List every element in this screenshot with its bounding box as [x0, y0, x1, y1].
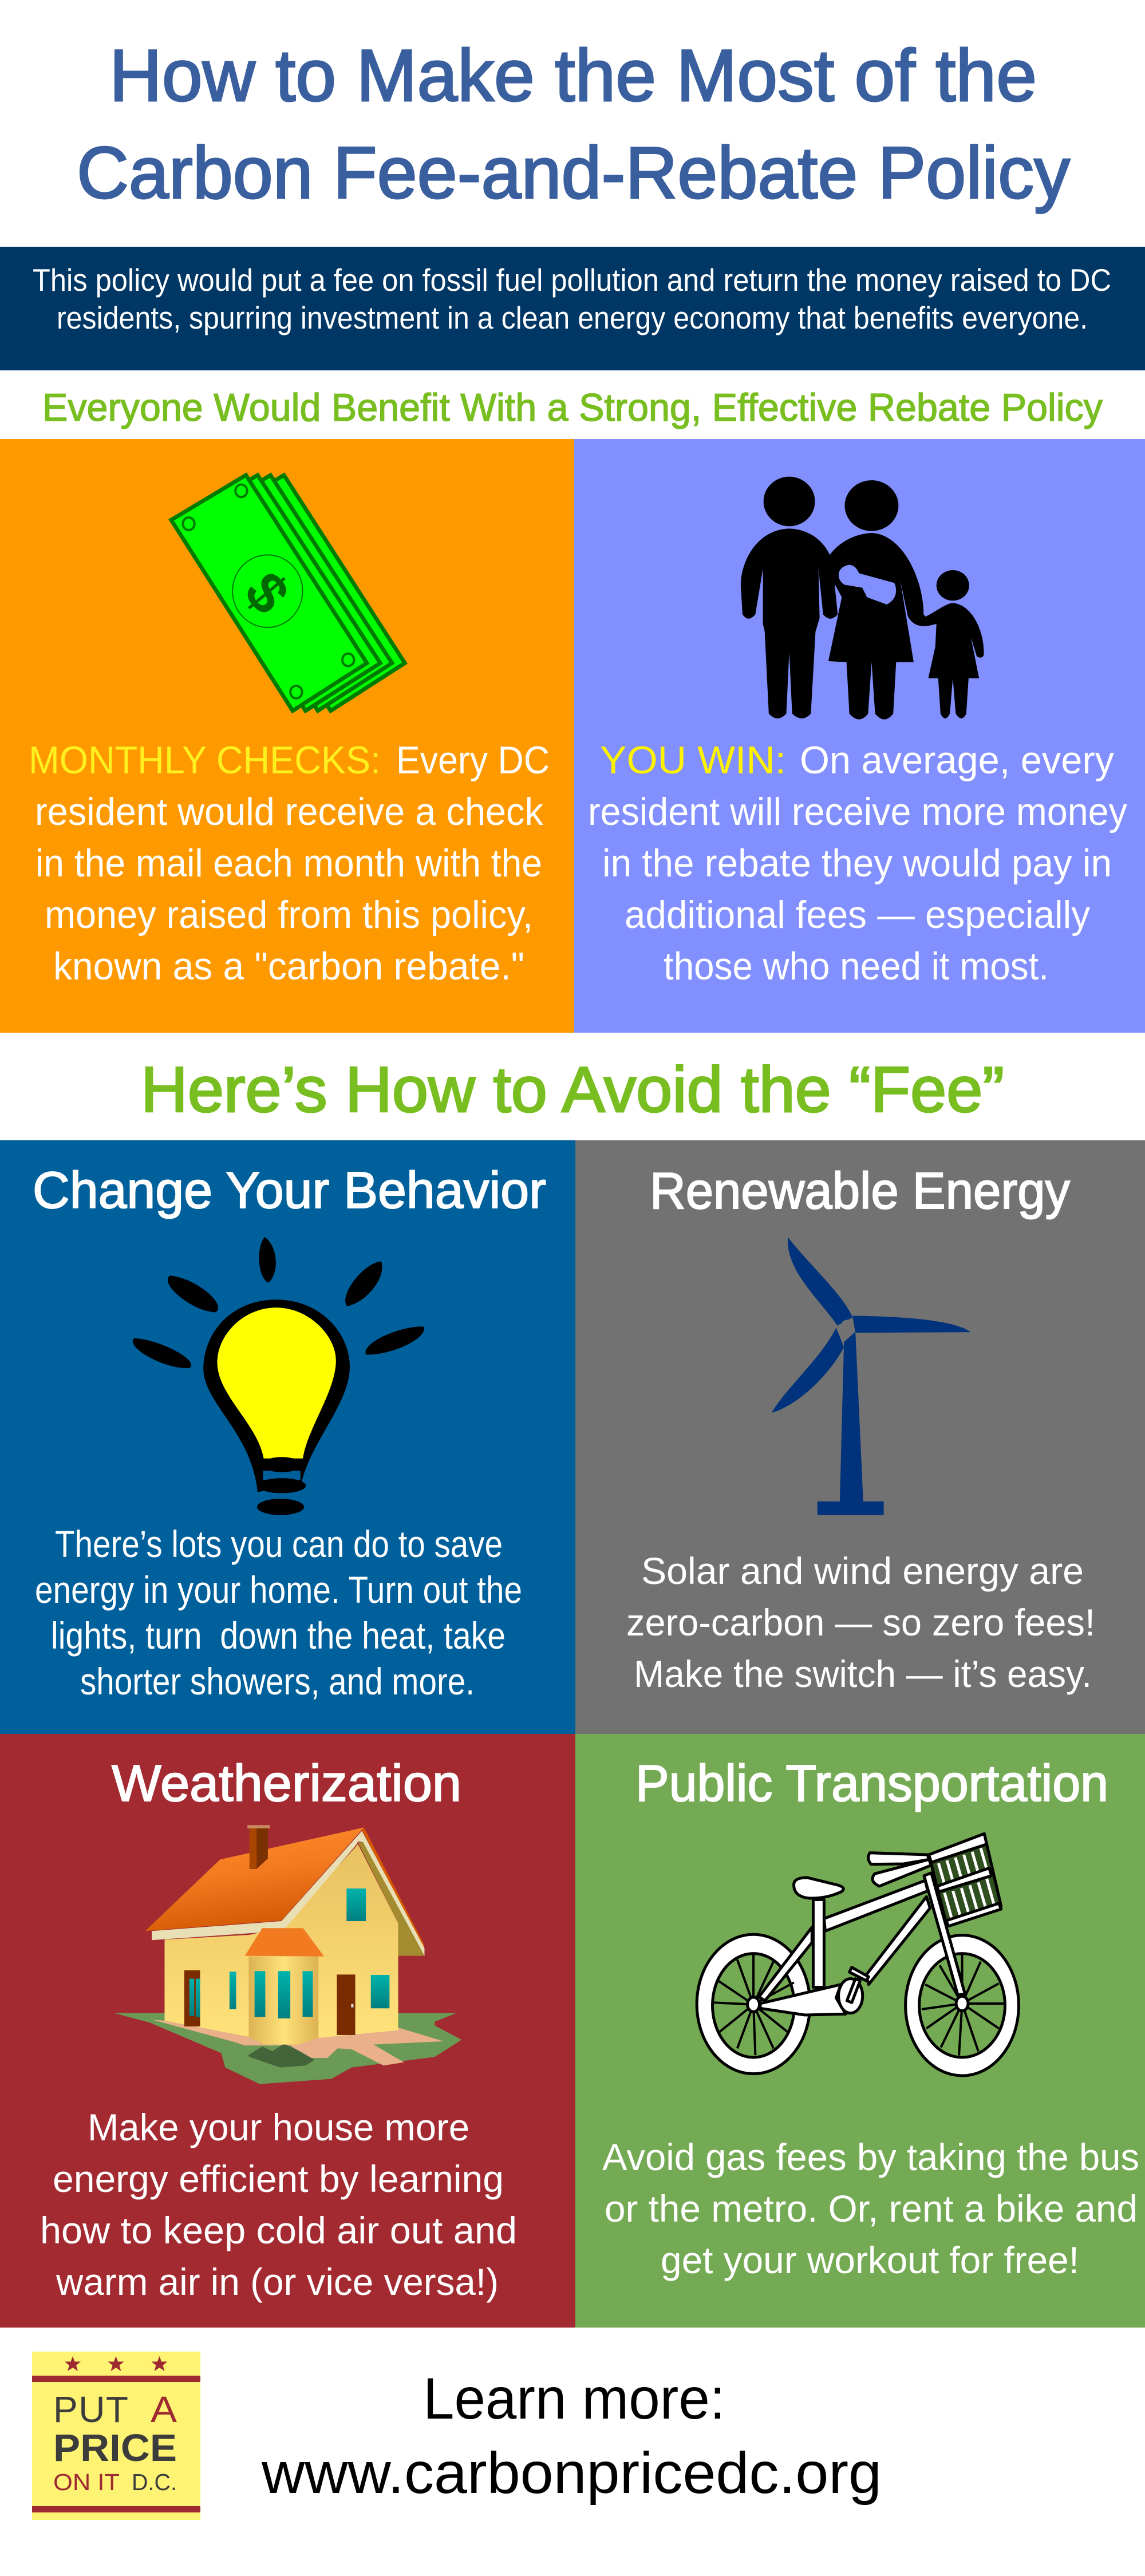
call to action: learn more: www.carbonpricedc.org [261, 2440, 882, 2506]
text: monthly checks: MONTHLY CHECKS: [29, 738, 381, 782]
title: How to Make the Most of the [109, 35, 1037, 117]
icon: stack of dollar bills [171, 475, 405, 711]
panel: weatherization [0, 1734, 575, 2328]
text: monthly checks [29, 738, 550, 988]
text: weatherization: how to keep cold air out and [40, 2209, 517, 2251]
icon: wind turbine [772, 1237, 970, 1515]
text: change your behavior: lights, turn down the heat, take [51, 1614, 506, 1657]
text: you win: additional fees — especially [625, 893, 1090, 937]
text: public transportation [602, 2136, 1139, 2281]
heading: everyone would benefit: Everyone Would Benefit With a Strong, Effective Rebate Policy [42, 386, 1103, 429]
text: weatherization: Make your house more [88, 2106, 469, 2148]
logo: put a price on it dc: PRICE [53, 2427, 177, 2470]
text: renewable energy [626, 1550, 1095, 1695]
text: change your behavior: energy in your home. Turn out the [35, 1568, 522, 1611]
text: weatherization: warm air in (or vice versa!) [56, 2261, 499, 2303]
text: change your behavior: shorter showers, and more. [80, 1660, 475, 1702]
text: renewable energy: Solar and wind energy are [641, 1550, 1084, 1592]
logo: put a price on it dc: D.C. [132, 2469, 177, 2495]
title [77, 35, 1070, 214]
text: public transportation: or the metro. Or, rent a bike and [605, 2187, 1138, 2230]
icon: bicycle [697, 1834, 1018, 2076]
heading: change your behavior: Change Your Behavior [33, 1162, 546, 1219]
heading: how to avoid the fee: Here’s How to Avoid the “Fee” [141, 1054, 1004, 1125]
text: you win: YOU WIN: [600, 738, 786, 782]
panel: monthly checks [0, 439, 574, 1033]
text: renewable energy: Make the switch — it’s easy. [634, 1653, 1092, 1695]
panel: you win [574, 439, 1145, 1033]
icon: light bulb [133, 1237, 424, 1515]
call to action: learn more [261, 2366, 882, 2506]
text: weatherization [40, 2106, 517, 2303]
text: renewable energy: zero-carbon — so zero fees! [626, 1601, 1095, 1643]
text: monthly checks: money raised from this policy, [45, 893, 533, 937]
intro banner [0, 247, 1145, 370]
text: you win: resident will receive more money [588, 790, 1127, 833]
text: you win [588, 738, 1127, 988]
icon: stack of dollar bills: $ [232, 560, 302, 626]
logo: put a price on it dc: PUT [53, 2389, 128, 2430]
title: Carbon Fee-and-Rebate Policy [77, 132, 1070, 214]
logo: put a price on it dc: ON IT [53, 2469, 120, 2495]
panel: public transportation [575, 1734, 1145, 2328]
heading: weatherization: Weatherization [112, 1755, 461, 1812]
text: monthly checks: in the mail each month with the [35, 841, 542, 885]
call to action: learn more: Learn more: [423, 2366, 725, 2431]
panel: change your behavior [0, 1140, 575, 1734]
text: change your behavior [35, 1523, 522, 1702]
text: monthly checks: known as a "carbon rebate." [53, 945, 524, 988]
text: monthly checks: Every DC [396, 738, 550, 782]
text: you win: On average, every [800, 738, 1114, 782]
heading: renewable energy: Renewable Energy [650, 1163, 1070, 1220]
panel: renewable energy [575, 1140, 1145, 1734]
text: public transportation: Avoid gas fees by taking the bus [602, 2136, 1139, 2178]
heading: public transportation: Public Transportation [635, 1755, 1108, 1812]
text: change your behavior: There’s lots you can do to save [55, 1523, 503, 1565]
logo: put a price on it dc: A [151, 2389, 177, 2430]
text: monthly checks: resident would receive a check [35, 790, 544, 833]
text: weatherization: energy efficient by learning [53, 2158, 504, 2200]
text: you win: in the rebate they would pay in [602, 841, 1112, 885]
text: you win: those who need it most. [664, 945, 1049, 988]
icon: family silhouette [741, 477, 984, 720]
logo: put a price on it dc [32, 2352, 200, 2520]
icon: house [114, 1825, 461, 2084]
text: public transportation: get your workout for free! [661, 2239, 1079, 2281]
